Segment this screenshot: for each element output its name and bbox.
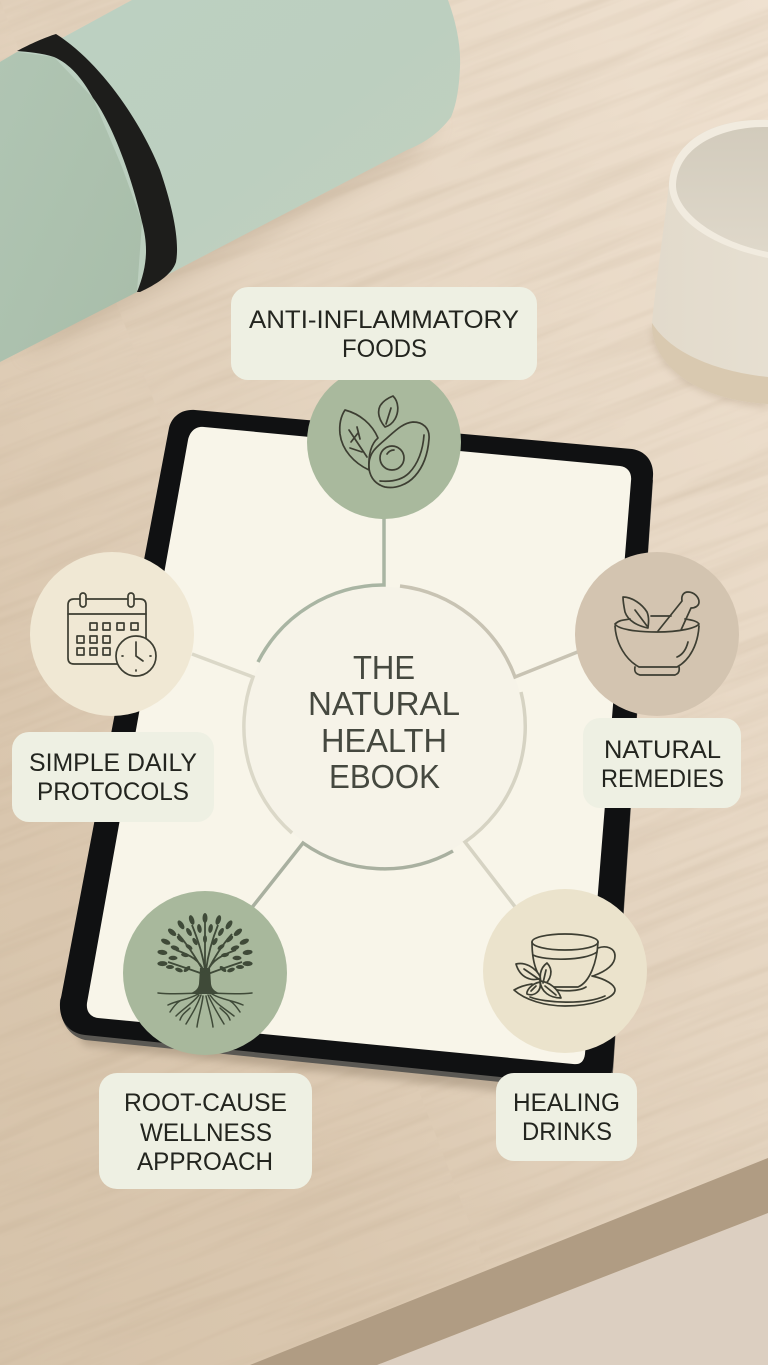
tablet screen [87,427,631,1064]
connector to protocols [192,654,292,833]
circle [123,891,287,1055]
circle [307,365,461,519]
tablet shadow [62,1010,612,1102]
node: root-cause wellness approach [123,891,287,1055]
icon: avocado and leaves [340,396,429,488]
label: simple daily protocols: PROTOCOLS [37,778,189,806]
label: healing drinks: DRINKS [522,1118,612,1146]
label: simple daily protocols: SIMPLE DAILY [29,749,197,777]
title: HEALTH [321,723,447,760]
hub fill [244,587,524,867]
label: root-cause wellness approach: WELLNESS [140,1119,272,1147]
label: anti-inflammatory foods: ANTI-INFLAMMATORY [249,306,519,334]
connector to remedies [400,586,580,677]
circle [483,889,647,1053]
label: root-cause wellness approach [99,1073,312,1189]
icon: mortar and pestle with leaf [615,592,699,675]
floor and desk edge [250,1158,768,1365]
node: healing drinks [483,889,647,1053]
label: root-cause wellness approach: ROOT-CAUSE [124,1089,287,1117]
label: natural remedies: NATURAL [604,736,721,764]
title [308,650,460,796]
node: natural remedies [575,552,739,716]
label: anti-inflammatory foods [231,287,537,380]
ceramic cup [652,120,768,408]
central hub [192,515,580,910]
tablet side edge [60,470,653,1091]
black elastic band [17,34,177,292]
circle [30,552,194,716]
title: NATURAL [308,686,460,723]
connector to root cause [250,843,453,910]
circle [575,552,739,716]
tablet body [60,410,653,1086]
icon: tea cup with mint [514,934,615,1006]
leaves [157,913,253,973]
node: anti-inflammatory foods [307,365,461,519]
title: EBOOK [329,759,440,796]
title: THE [353,650,415,687]
label: simple daily protocols [12,732,214,822]
connector to drinks [465,692,525,908]
label: healing drinks [496,1073,637,1161]
node: simple daily protocols [30,552,194,716]
trunk [188,968,222,994]
tablet [60,410,653,1102]
icon: tree with roots [157,913,253,1027]
branches [168,922,242,974]
label: natural remedies [583,718,741,808]
icon: calendar and clock [68,593,156,676]
label: natural remedies: REMEDIES [601,765,724,793]
roots [158,993,252,1027]
label: healing drinks: HEALING [513,1089,620,1117]
label: anti-inflammatory foods: FOODS [342,335,427,363]
yoga mat [0,0,460,362]
connector to foods [258,515,384,662]
label: root-cause wellness approach: APPROACH [137,1148,273,1176]
